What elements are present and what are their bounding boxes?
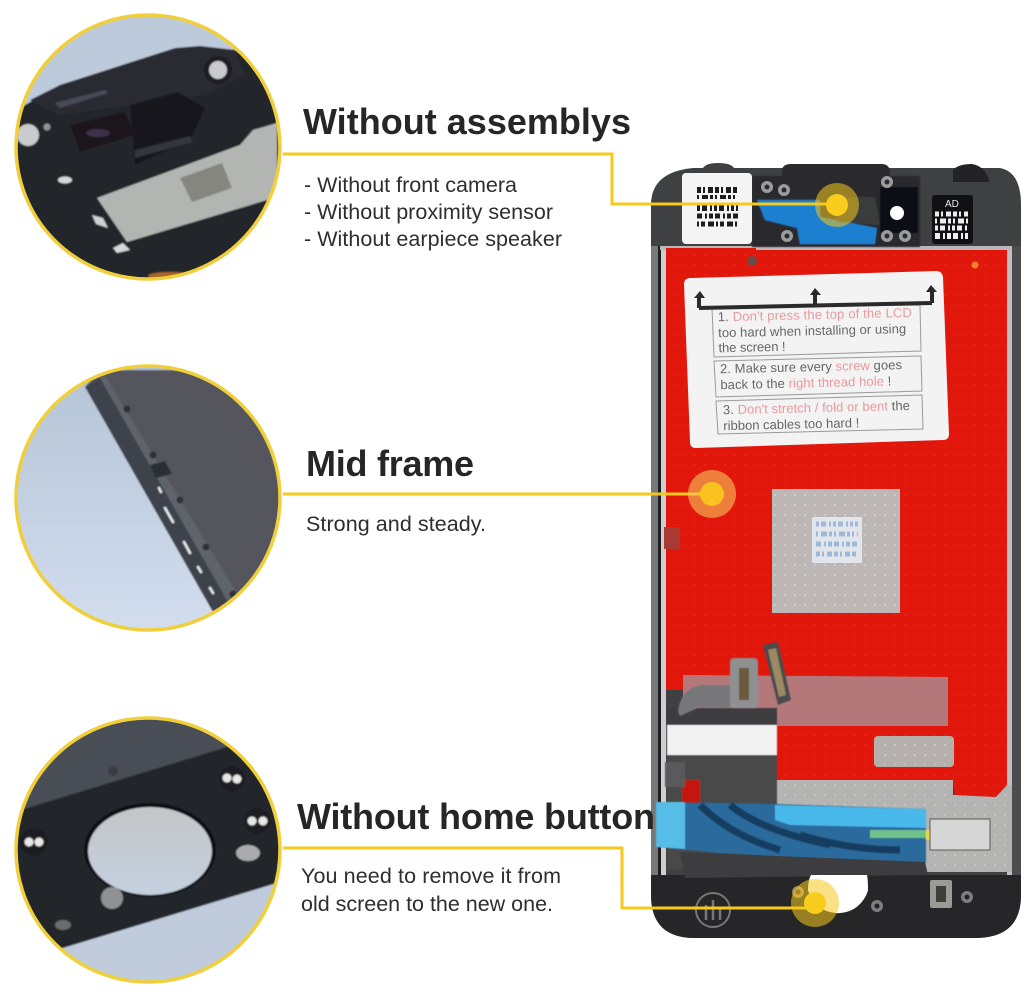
marker: home button (791, 879, 839, 927)
phone screen assembly (651, 163, 1021, 940)
red plate hole (747, 256, 757, 266)
translucent strip (683, 675, 948, 726)
text: home button: old screen to the new one. (301, 892, 553, 916)
text: assemblys list: - Without front camera (304, 173, 517, 197)
sticker arrows (699, 291, 932, 308)
text: assemblys list (304, 173, 562, 251)
text: home button (301, 864, 561, 916)
leader line: mid frame (283, 492, 712, 496)
right top clip (953, 164, 990, 182)
leader line: assemblys (283, 154, 836, 204)
sticker text: 2. Make sure every screw goes (720, 357, 903, 376)
heading: mid frame: Mid frame (306, 443, 474, 484)
top camera hole (890, 206, 904, 220)
top bumps (703, 163, 734, 168)
bottom screws (792, 886, 973, 912)
white QR label (682, 173, 752, 244)
phone shell (651, 165, 1021, 940)
marker: mid frame (688, 470, 736, 518)
heading: without home button: Without home button (297, 796, 655, 837)
flex connectors (678, 642, 791, 716)
sticker text: back to the right thread hole ! (720, 373, 892, 392)
panel: mid frame close-up (10, 360, 290, 640)
recycling mark (696, 893, 730, 927)
text: home button: You need to remove it from (301, 864, 561, 888)
sticker text: the screen ! (718, 339, 786, 355)
red side tab (664, 527, 680, 549)
top screws (761, 176, 911, 242)
AD label (932, 195, 973, 244)
leader line: home button (283, 848, 815, 908)
sticker text: too hard when installing or using (718, 321, 906, 340)
marker: camera (815, 183, 859, 227)
silver square with QR (772, 489, 900, 613)
bottom connector (930, 880, 952, 908)
sticker boxes (712, 305, 923, 434)
home button hole (808, 875, 868, 913)
sticker text (718, 305, 914, 433)
sticker text: 3. Don't stretch / fold or bent the (723, 398, 910, 417)
bottom silver area (776, 780, 1012, 872)
panel: front camera close-up (10, 10, 290, 290)
speaker plate (930, 819, 990, 850)
text: assemblys list: - Without earpiece speaker (304, 227, 562, 251)
sticker text: ribbon cables too hard ! (723, 415, 859, 433)
text: assemblys list: - Without proximity sensor (304, 200, 553, 224)
blue protective tape (656, 802, 931, 863)
lower dark band (680, 852, 928, 878)
black flex cable (665, 708, 777, 870)
text: mid frame: Strong and steady. (306, 512, 486, 536)
orange dot (972, 262, 978, 268)
top bracket area (752, 176, 920, 247)
instruction sticker (684, 271, 949, 448)
red back plate (666, 248, 1007, 797)
top notch (782, 164, 890, 178)
panel: home button close-up (14, 716, 282, 984)
AD label: AD (945, 199, 959, 210)
sticker text: 1. Don't press the top of the LCD (718, 305, 912, 324)
small silver patch (874, 736, 954, 767)
heading: without assemblys: Without assemblys (303, 101, 631, 142)
